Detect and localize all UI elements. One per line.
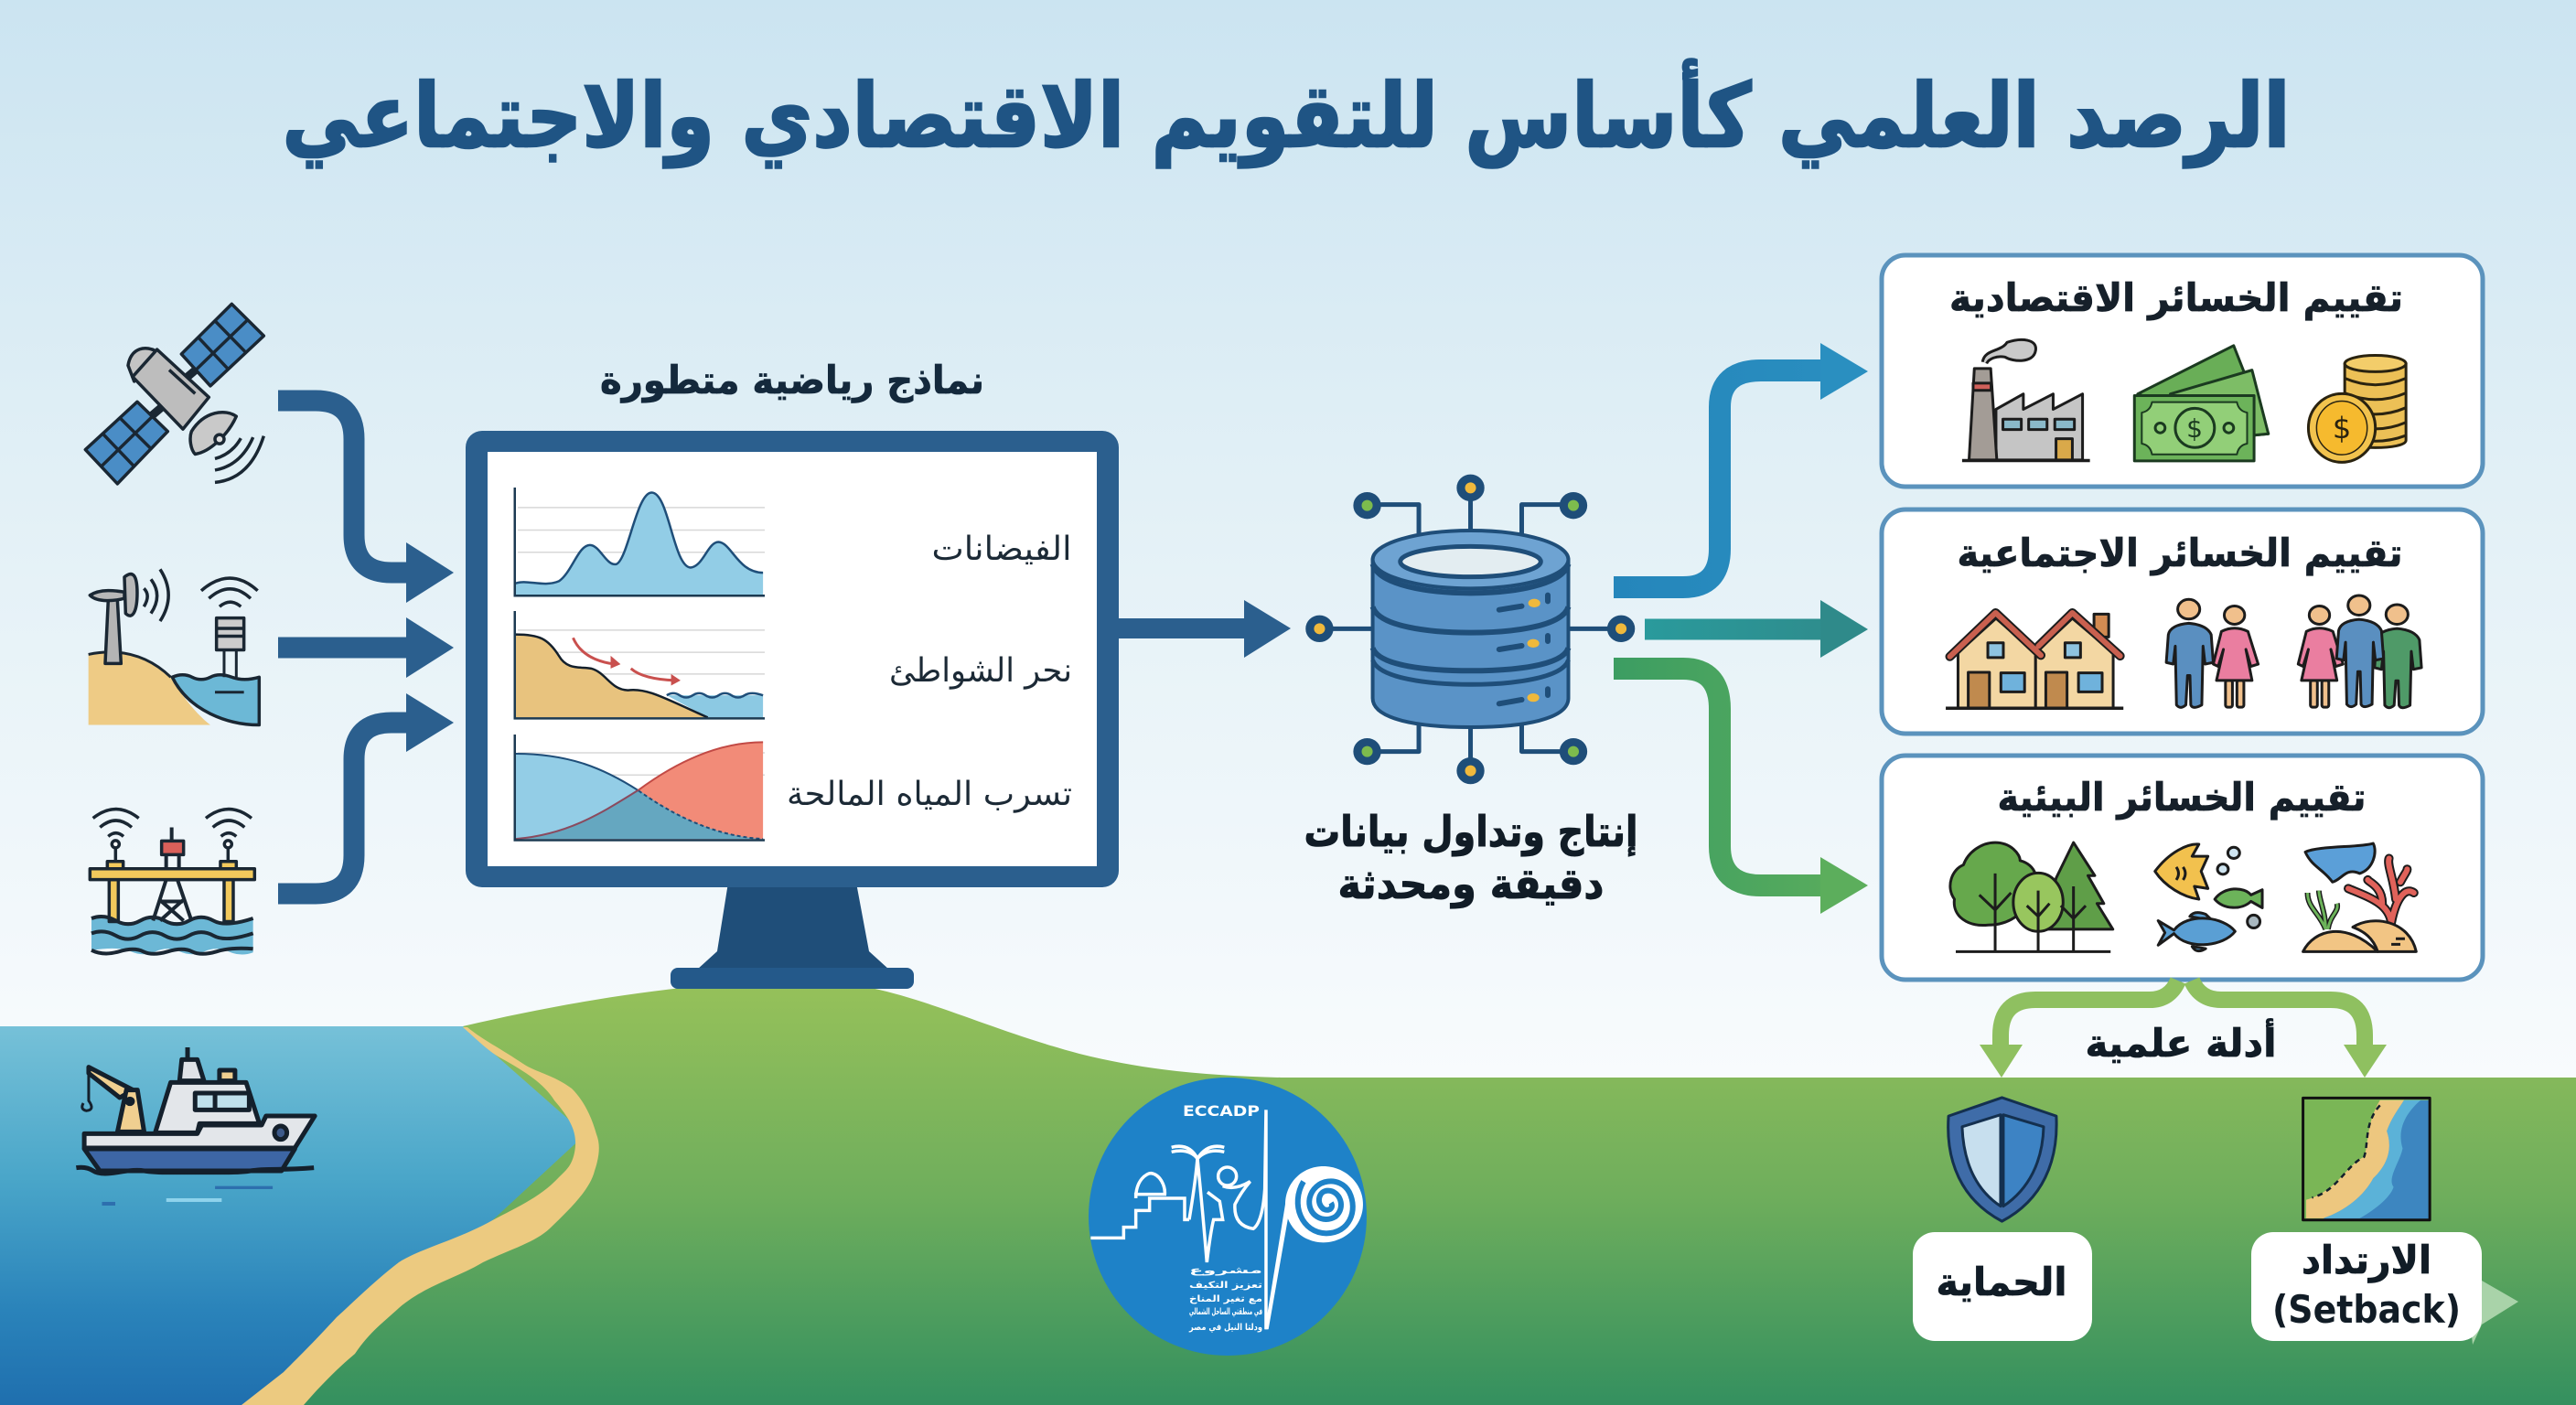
monitor base: [671, 968, 914, 989]
arrow: platform to model: [278, 693, 454, 894]
icon: factory: [1962, 339, 2090, 461]
icon: offshore monitoring platform: [90, 810, 254, 955]
icon: couple: [2166, 599, 2259, 707]
icon: research vessel: [76, 1047, 315, 1206]
sea: [0, 1026, 659, 1405]
label box: setback: [2251, 1232, 2482, 1341]
panel: social losses: [1882, 509, 2483, 734]
dollar sign: $: [2186, 413, 2203, 444]
beach: [242, 1027, 599, 1405]
icon: shield: [1948, 1098, 2056, 1221]
label box: protection: الحماية: [1936, 1260, 2067, 1304]
icon: coastal setback map: [2303, 1098, 2430, 1220]
arrow: coastal station to model: [278, 617, 454, 678]
label: saltwater intrusion: تسرب المياه المالحة: [787, 776, 1072, 813]
panel: economic losses: [1882, 255, 2483, 487]
arrow: satellite to model: [278, 401, 454, 603]
text: data production and exchange: دقيقة ومحدثة: [1337, 859, 1605, 908]
land hill: [293, 981, 2576, 1405]
label box: protection: [1913, 1232, 2092, 1341]
icon: database with network nodes: [1307, 477, 1633, 782]
icon: banknotes: [2134, 346, 2269, 461]
icon: family: [2298, 595, 2421, 708]
title: الرصد العلمي كأساس للتقويم الاقتصادي والاجتماعي: [282, 59, 2291, 168]
label box: setback: (Setback): [2272, 1287, 2461, 1332]
panel: environmental losses: [1882, 756, 2483, 980]
icon: coastal turbine and sensor station: [89, 569, 259, 725]
icon: trees: [1950, 842, 2113, 951]
heading: social losses: تقييم الخسائر الاجتماعية: [1958, 531, 2402, 576]
logo project name: مشروع: [1189, 1266, 1262, 1276]
chart: beach erosion model: [515, 611, 765, 718]
heading: environmental losses: تقييم الخسائر البيئية: [1998, 775, 2366, 820]
logo project name: ودلتا النيل في مصر: [1188, 1323, 1262, 1333]
text: data production and exchange: إنتاج وتداول بيانات: [1304, 807, 1637, 857]
icon: coral reef: [2303, 843, 2416, 951]
chart: flood model: [515, 488, 765, 595]
label: beach erosion: نحر الشواطئ: [889, 652, 1072, 690]
background sky: [0, 0, 2576, 1079]
monitor: [466, 431, 1119, 989]
icon: houses: [1946, 613, 2123, 708]
icon: fish: [2155, 844, 2262, 951]
logo: ECCADP: [1089, 1078, 1367, 1356]
arrow: data to economic assessment: [1614, 343, 1868, 587]
heading: economic losses: تقييم الخسائر الاقتصادية: [1949, 275, 2403, 321]
text: data production and exchange: [1304, 807, 1637, 908]
dollar sign: $: [2333, 411, 2351, 445]
logo project name: في منطقتي الساحل الشمالي: [1189, 1307, 1262, 1317]
logo project name: [1188, 1266, 1262, 1333]
label box: setback: الارتداد: [2302, 1238, 2431, 1282]
chart: saltwater intrusion model: [515, 735, 765, 840]
arrow: data to social assessment: [1645, 600, 1868, 658]
monitor stand: [697, 883, 889, 970]
arrow: model to database: [1119, 600, 1291, 658]
arrow: evidence to protection: [1980, 981, 2178, 1078]
label: floods: الفيضانات: [931, 531, 1072, 568]
decorative arrow tip: [2470, 1281, 2518, 1345]
logo project name: تعزيز التكيف: [1189, 1281, 1262, 1291]
logo wordmark: ECCADP: [1183, 1102, 1260, 1120]
icon: satellite: [85, 304, 263, 484]
monitor frame: [466, 431, 1119, 887]
logo project name: مع تغير المناخ: [1189, 1294, 1262, 1304]
icon: gold coins: [2308, 356, 2406, 462]
monitor screen: [488, 452, 1097, 866]
arrow: data to environmental assessment: [1614, 669, 1868, 914]
label: scientific evidence: أدلة علمية: [2086, 1018, 2276, 1066]
heading: mathematical models: نماذج رياضية متطورة: [600, 358, 984, 403]
arrow: evidence to setback: [2192, 981, 2387, 1078]
